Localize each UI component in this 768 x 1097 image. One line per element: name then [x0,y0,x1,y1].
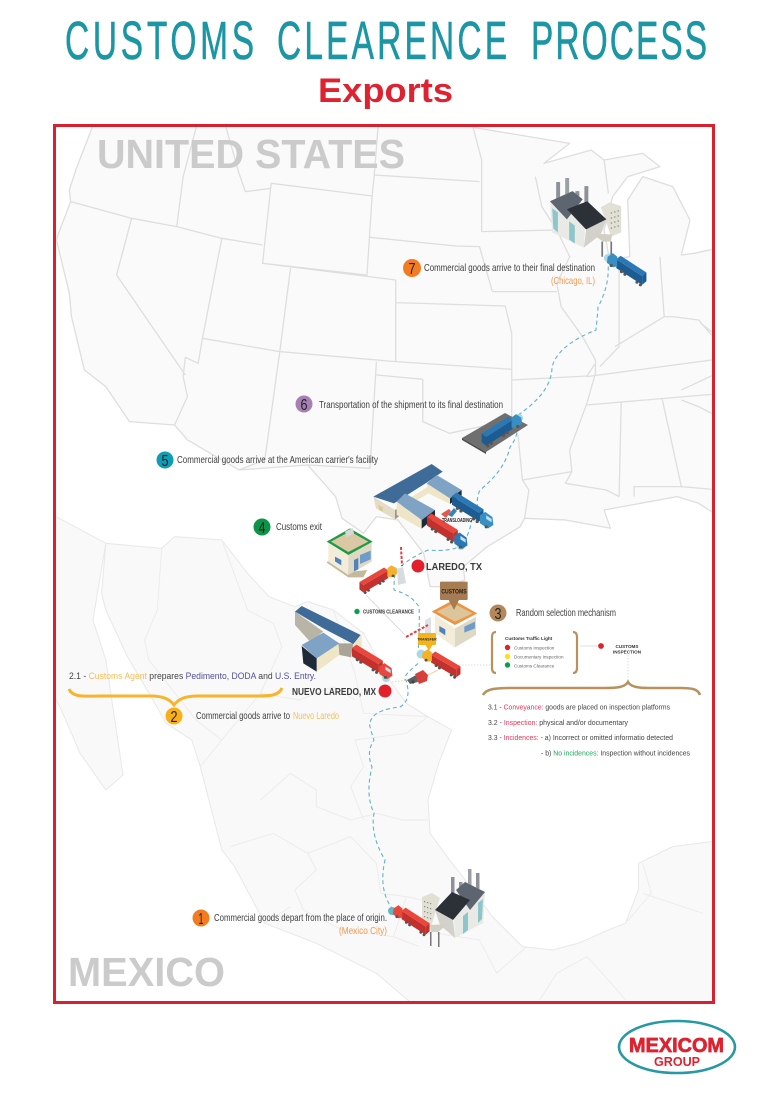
panel: customs traffic light: Customs Traffic Light [505,636,553,641]
step 6: 6 [300,397,308,414]
panel: customs traffic light: Documentary Inspection [514,654,564,660]
map: United States states [56,120,724,587]
panel: customs traffic light: Customs Clearance [514,664,555,668]
step 3 [490,604,616,623]
step 1: 1 [198,911,204,928]
thin connector lines [366,595,628,682]
brown brace [483,682,700,695]
step 3 details: 3.3 - Incidences: - a) Incorrect or omitted informatio detected [488,733,673,742]
Laredo TX marker: LAREDO, TX [426,561,482,573]
title: PROCESS [531,10,707,71]
customs exit building [327,528,373,577]
subtitle: Exports [318,72,453,110]
step 3 details: - b) No incidences: Inspection without incidences [541,748,690,758]
step 2 [166,708,339,726]
customs barrier [406,617,431,645]
step 3: Random selection mechanism [516,607,616,619]
step 5 [156,452,379,470]
customs building with sign: CUSTOMS [441,588,467,595]
logo: MEXICOM [629,1035,724,1057]
warehouse: American carrier [373,464,462,529]
map: United States and Mexico [50,120,724,1010]
title [65,10,707,71]
transloading label [441,508,472,524]
step 3 details: 3.2 - Inspection: physical and/or documentary [488,718,628,727]
step 7: 7 [408,261,416,278]
customs building with sign [432,582,477,647]
customs inspection label: CUSTOMS [616,644,638,649]
truck: red at Nuevo Laredo [352,645,392,682]
step 4: Customs exit [276,521,322,533]
truck on platform [462,413,528,454]
map frame [54,126,714,1002]
step 1: (Mexico City) [339,925,387,937]
step 3: 3 [494,606,502,623]
Laredo TX marker [412,560,482,573]
title: CLEARENCE [277,10,507,71]
step 7: Commercial goods arrive to their final destination [424,262,595,274]
truck: red at customs exit [359,565,398,594]
step 3 details: 3.1 - Conveyance: goods are placed on inspection platforms [488,702,670,712]
panel: customs traffic light: Customs Inspection [514,646,555,650]
Nuevo Laredo marker: NUEVO LAREDO, MX [292,687,376,698]
step 5: Commercial goods arrive at the American carrier's facility [177,454,379,466]
truck: blue at warehouse [452,492,493,529]
exit barrier [397,547,406,585]
transfer sign: TRANSFER [417,638,437,642]
step 1 [192,910,387,937]
step 1: Commercial goods depart from the place of origin. [214,912,387,924]
step 7 [403,259,595,287]
factory: Mexico City [422,869,485,947]
step 7: (Chicago, IL) [551,275,595,287]
step 6: Transportation of the shipment to its final destination [319,399,503,411]
step 4: 4 [258,520,266,537]
truck: red at warehouse [427,514,467,550]
step 2: Commercial goods arrive to [196,710,290,722]
title: CUSTOMS [65,10,254,71]
step 2: Nuevo Laredo [293,710,339,722]
logo [619,1021,735,1073]
step 2: 2 [170,709,178,726]
country label: United States: UNITED STATES [97,131,405,177]
truck: Mexico City [388,905,430,936]
step 6 [296,396,503,414]
panel: customs traffic light [492,632,577,673]
amber brace [69,688,282,705]
customs inspection label [598,643,642,654]
customs clearance label: CUSTOMS CLEARANCE [363,610,415,616]
transloading label: TRANSLOADING [442,518,472,524]
dashed shipment route [369,262,608,910]
step 5: 5 [162,453,169,470]
step 3 details [488,702,690,758]
step 2.1 note: 2.1 - Customs Agent prepares Pedimento, DODA and U.S. Entry. [69,671,316,682]
customs inspection label: INSPECTION [613,650,642,654]
factory: Chicago [550,178,621,257]
warehouse: Nuevo Laredo [295,606,362,672]
map: Mexico states [50,513,724,1010]
logo: GROUP [654,1054,700,1069]
country label: Mexico: MEXICO [68,949,225,995]
truck cab [407,670,428,684]
truck: Chicago [604,253,646,286]
transfer sign [417,633,437,651]
truck: red at transfer [416,649,460,679]
step 4 [254,518,322,537]
